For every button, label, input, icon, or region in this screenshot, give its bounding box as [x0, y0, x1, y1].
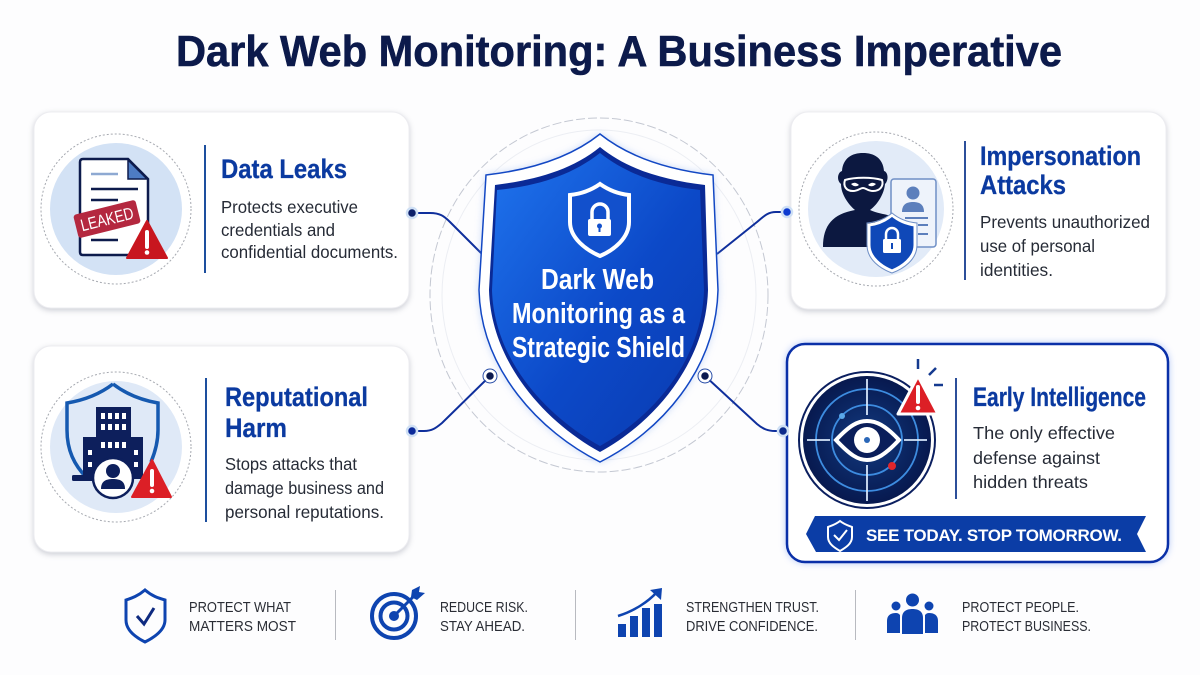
- shield label: Strategic Shield: [512, 332, 685, 364]
- description: The only effective: [973, 423, 1115, 443]
- shield label: Monitoring as a: [512, 298, 686, 330]
- footer item: reduce risk: STAY AHEAD.: [440, 619, 525, 635]
- description: defense against: [973, 448, 1100, 468]
- icon: target: [372, 586, 425, 638]
- description: [225, 454, 384, 522]
- connectors: [417, 212, 785, 431]
- heading: Reputational: [225, 382, 368, 412]
- banner: [806, 516, 1146, 552]
- divider: [855, 590, 856, 640]
- icon: banner shield check: [828, 521, 852, 551]
- footer item: reduce risk: [372, 586, 528, 638]
- divider: [204, 145, 206, 273]
- icon: growth chart: [618, 588, 662, 637]
- footer item: reduce risk: REDUCE RISK.: [440, 600, 528, 616]
- footer item: strengthen trust: [618, 588, 819, 637]
- panel: data leaks: [34, 112, 409, 308]
- footer item: strengthen trust: STRENGTHEN TRUST.: [686, 600, 819, 616]
- banner: SEE TODAY. STOP TOMORROW.: [866, 526, 1122, 545]
- title: Dark Web Monitoring: A Business Imperative: [176, 27, 1062, 76]
- footer item: protect people: PROTECT PEOPLE.: [962, 600, 1079, 616]
- footer item: protect what matters most: PROTECT WHAT: [189, 600, 291, 616]
- central rings: [430, 118, 768, 472]
- description: Prevents unauthorized: [980, 212, 1150, 232]
- heading: Harm: [225, 413, 287, 443]
- icon: lock shield: [570, 184, 629, 256]
- description: Protects executive: [221, 197, 358, 217]
- description: [980, 212, 1150, 280]
- divider: [964, 141, 966, 280]
- shield label: [512, 264, 686, 364]
- footer item: strengthen trust: DRIVE CONFIDENCE.: [686, 619, 818, 635]
- footer item: protect people: [887, 594, 1091, 635]
- connector nodes: [407, 207, 792, 436]
- heading: Data Leaks: [221, 154, 347, 184]
- description: damage business and: [225, 478, 384, 498]
- heading: Impersonation: [980, 141, 1141, 171]
- icon: leaked document: [41, 134, 191, 284]
- icon: shield check: [126, 590, 165, 642]
- description: credentials and: [221, 220, 335, 240]
- description: [973, 423, 1115, 492]
- panel: impersonation attacks: [791, 112, 1166, 309]
- shield label: Dark Web: [541, 264, 654, 296]
- icon: people group: [887, 594, 938, 634]
- divider: [955, 378, 957, 499]
- footer item: protect what matters most: [126, 590, 296, 642]
- heading: [980, 141, 1141, 200]
- icon: leaked document: LEAKED: [79, 204, 136, 235]
- description: identities.: [980, 260, 1053, 280]
- heading: Attacks: [980, 170, 1066, 200]
- central shield: [479, 134, 718, 462]
- heading: [225, 382, 368, 443]
- description: use of personal: [980, 236, 1095, 256]
- panel: reputational harm: [34, 346, 409, 552]
- footer item: protect what matters most: MATTERS MOST: [189, 619, 296, 635]
- description: confidential documents.: [221, 242, 398, 262]
- icon: building with shield: [41, 372, 191, 522]
- description: Stops attacks that: [225, 454, 357, 474]
- divider: [575, 590, 576, 640]
- heading: Early Intelligence: [973, 382, 1146, 412]
- icon: radar eye: [799, 359, 943, 508]
- panel: early intelligence: [787, 344, 1168, 562]
- description: hidden threats: [973, 472, 1088, 492]
- description: [221, 197, 398, 262]
- description: personal reputations.: [225, 502, 384, 522]
- divider: [335, 590, 336, 640]
- footer item: protect people: PROTECT BUSINESS.: [962, 619, 1091, 635]
- icon: masked impersonator: [799, 132, 953, 286]
- divider: [205, 378, 207, 522]
